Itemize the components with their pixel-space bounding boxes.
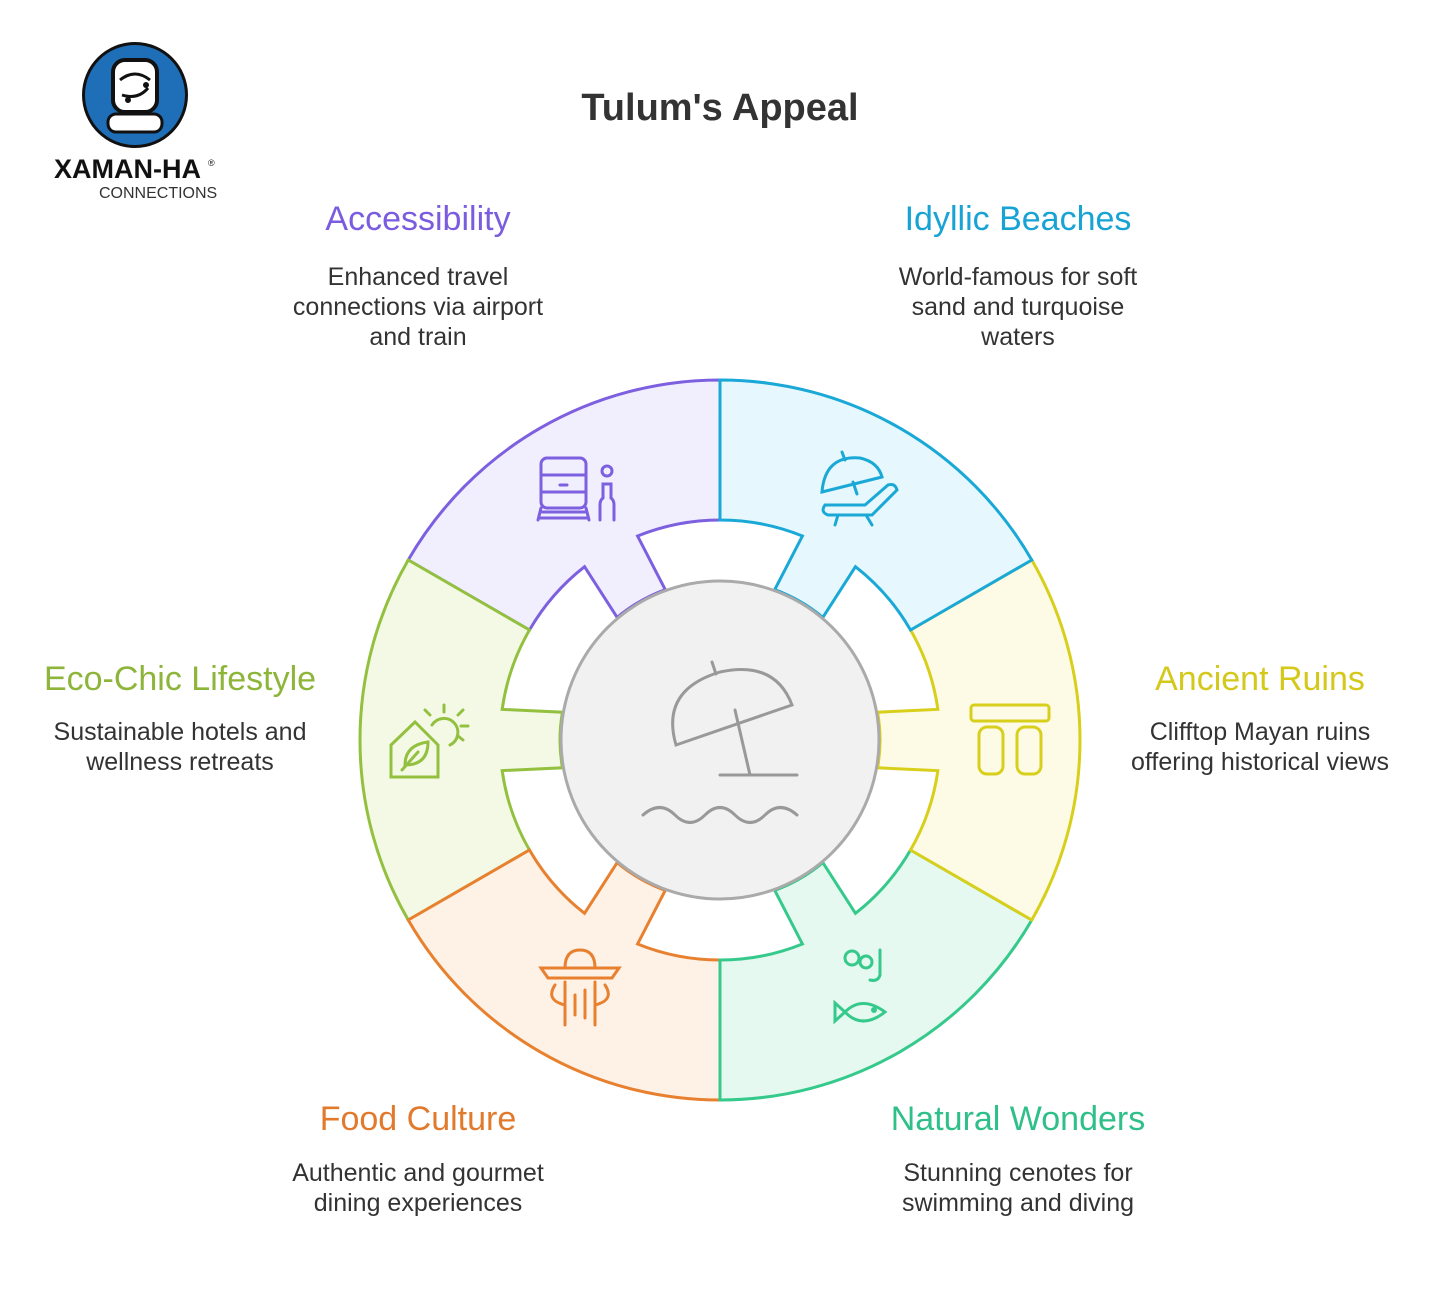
text: ancient ruins xyxy=(1131,660,1389,776)
segment: eco-chic xyxy=(252,560,625,955)
text: idyllic beaches: waters xyxy=(981,323,1055,351)
text: accessibility: Enhanced travel xyxy=(328,263,508,291)
text: idyllic beaches: sand and turquoise xyxy=(912,293,1124,321)
text: accessibility: Accessibility xyxy=(325,200,511,238)
text: accessibility: and train xyxy=(369,323,467,351)
text: ancient ruins: offering historical views xyxy=(1131,748,1389,776)
text: idyllic beaches: World-famous for soft xyxy=(899,263,1137,291)
icon: sombrero cactus xyxy=(541,950,619,1025)
logo xyxy=(54,42,217,202)
segment: ruins xyxy=(815,525,1188,920)
logo: ® xyxy=(208,158,215,168)
segment: accessibility xyxy=(408,380,720,630)
text: natural wonders: Stunning cenotes for xyxy=(903,1159,1133,1187)
text: accessibility xyxy=(293,200,543,351)
text: idyllic beaches xyxy=(898,200,1137,351)
icon: center umbrella xyxy=(643,662,797,822)
text: eco-chic: wellness retreats xyxy=(86,748,274,776)
segment: beaches xyxy=(659,290,1032,685)
logo: XAMAN-HA xyxy=(54,154,201,184)
segment: natural xyxy=(720,850,1032,1100)
text: food culture: Food Culture xyxy=(320,1100,516,1138)
text: idyllic beaches: Idyllic Beaches xyxy=(905,200,1131,238)
title: Tulum's Appeal xyxy=(581,87,859,129)
text: eco-chic: Sustainable hotels and xyxy=(54,718,306,746)
text: ancient ruins: Ancient Ruins xyxy=(1155,660,1365,698)
text: natural wonders: Natural Wonders xyxy=(891,1100,1145,1138)
segment: food xyxy=(408,795,781,1190)
text: eco-chic xyxy=(44,660,316,776)
text: food culture: dining experiences xyxy=(314,1189,522,1217)
icon: train xyxy=(538,458,614,520)
icon: beach chair xyxy=(822,452,897,525)
text: ancient ruins: Clifftop Mayan ruins xyxy=(1150,718,1370,746)
icon: snorkel fish xyxy=(835,950,885,1021)
icon: ruins xyxy=(971,705,1049,774)
text: food culture: Authentic and gourmet xyxy=(292,1159,544,1187)
text: eco-chic: Eco-Chic Lifestyle xyxy=(44,660,316,698)
text: natural wonders xyxy=(891,1100,1145,1217)
center circle xyxy=(561,581,879,899)
text: food culture xyxy=(292,1100,544,1217)
logo: CONNECTIONS xyxy=(99,185,217,202)
text: natural wonders: swimming and diving xyxy=(902,1189,1134,1217)
icon: eco house xyxy=(391,705,468,777)
text: accessibility: connections via airport xyxy=(293,293,543,321)
